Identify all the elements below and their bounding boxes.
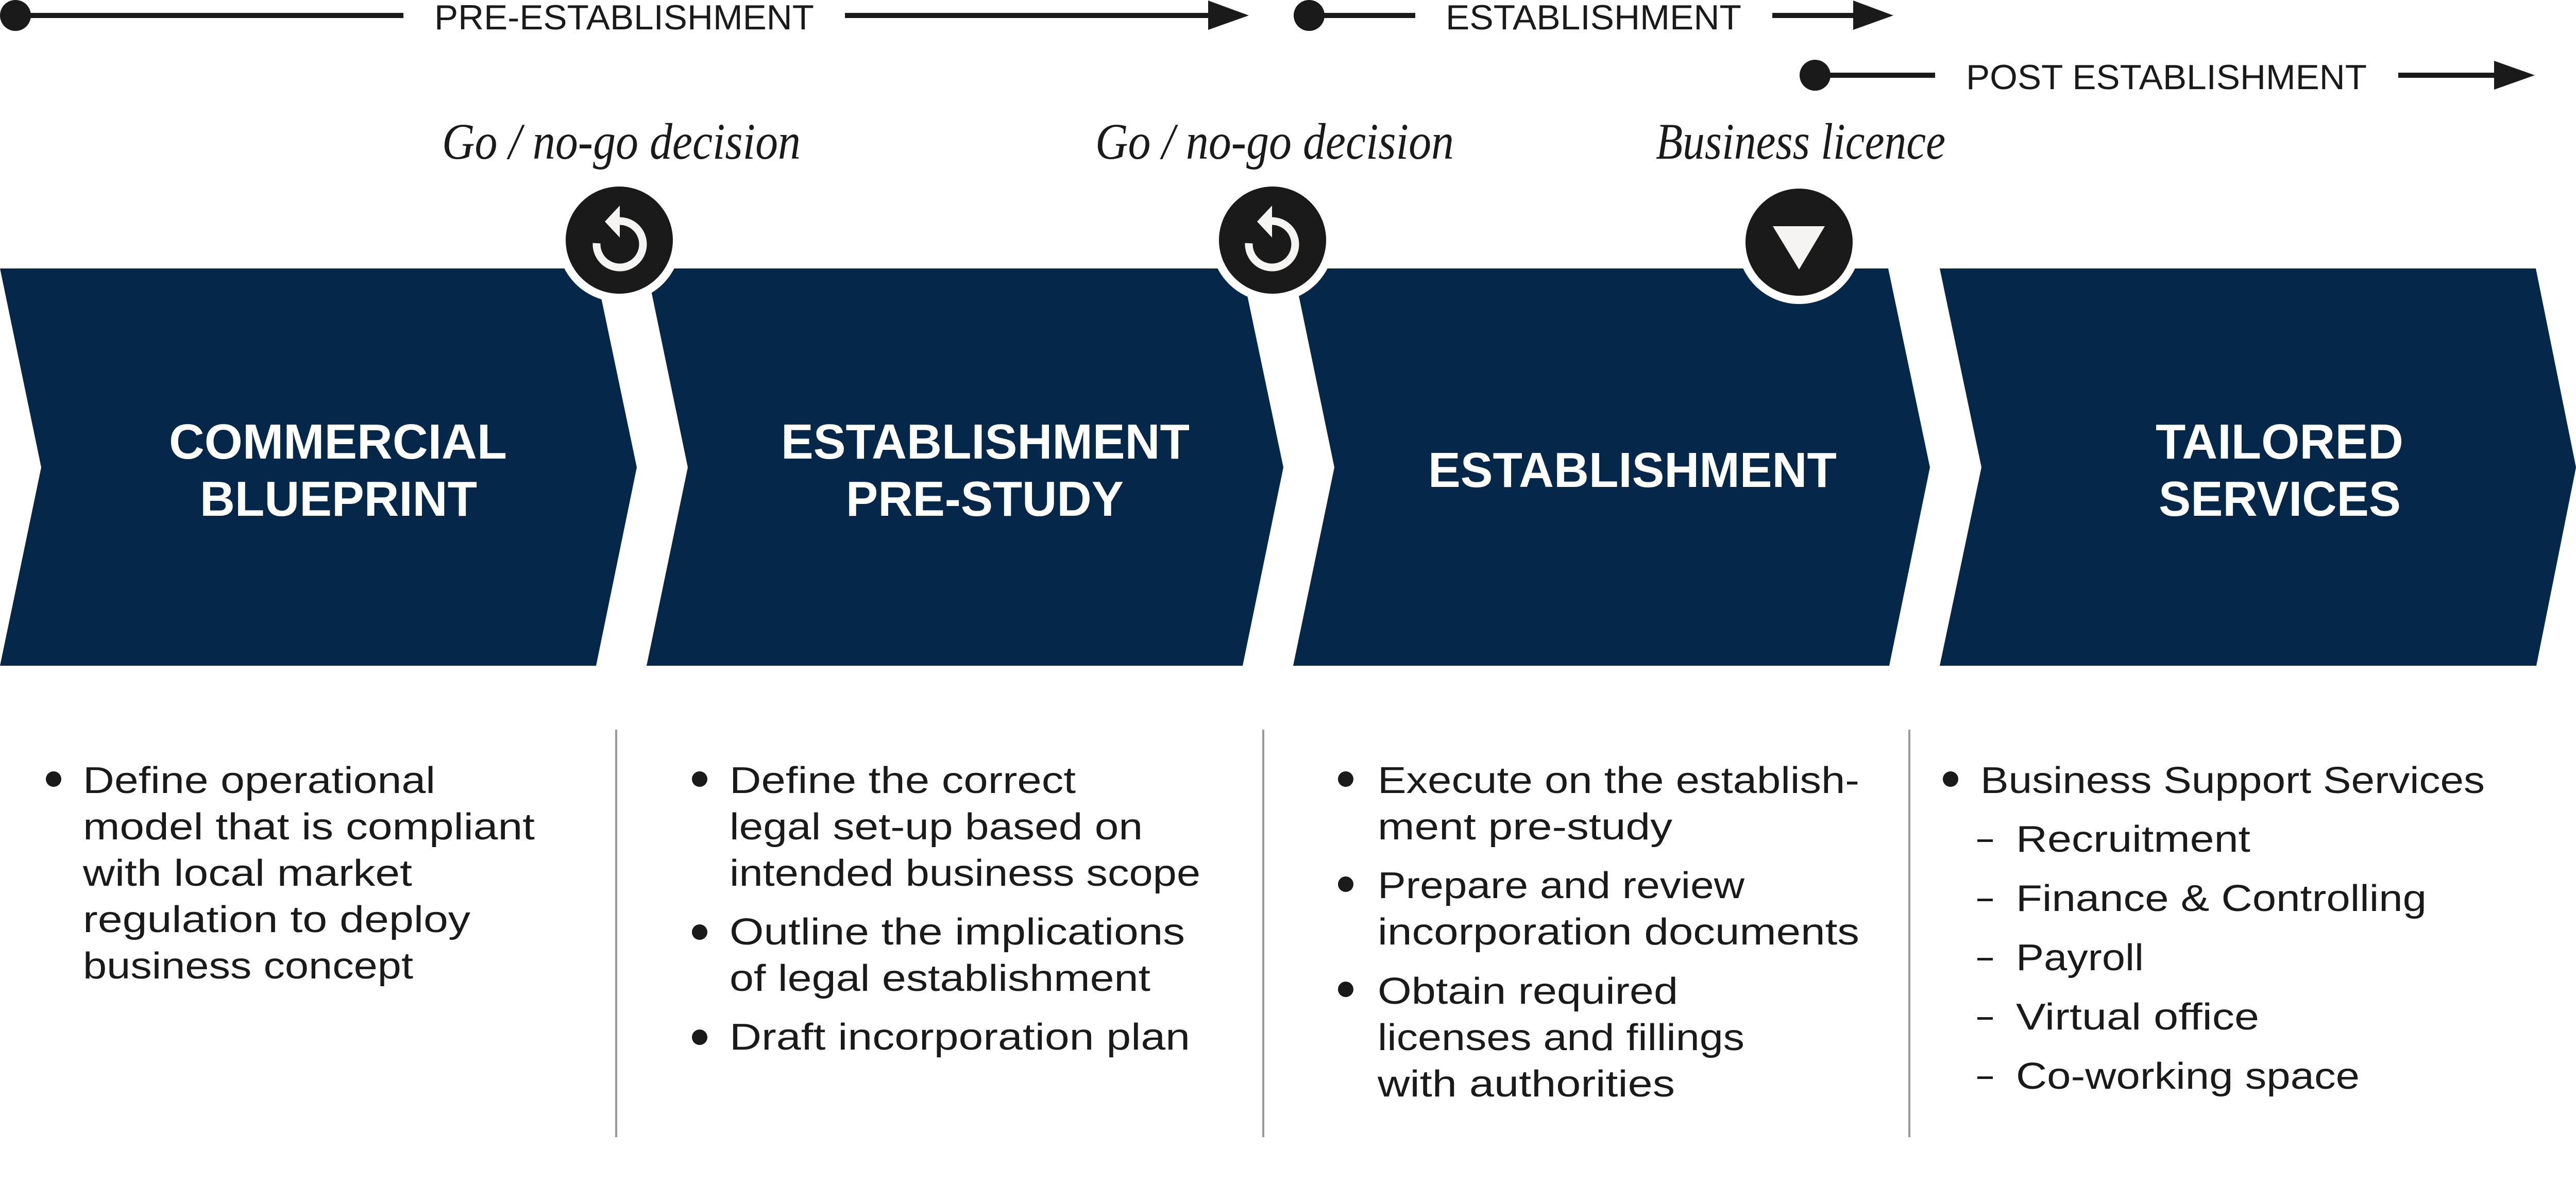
chevron: establishment pre-study: ESTABLISHMENT: [781, 414, 1190, 469]
text block: tailored services details: Virtual office: [2016, 997, 2259, 1038]
text block: establishment details: [1338, 760, 1859, 1105]
timeline arrow: establishment: [1294, 0, 1893, 37]
text block: pre-study details: intended business scope: [730, 853, 1200, 894]
chevron: commercial blueprint: COMMERCIAL: [169, 414, 507, 469]
text block: establishment details: ment pre-study: [1378, 806, 1672, 848]
text block: pre-study details: legal set-up based on: [730, 806, 1143, 848]
chevron: establishment pre-study: PRE-STUDY: [846, 471, 1124, 527]
milestone label: go / no-go decision 1: Go / no-go decision: [442, 113, 801, 170]
timeline arrow: post establishment: POST ESTABLISHMENT: [1966, 58, 2367, 97]
text block: commercial blueprint details: Define operational: [83, 760, 435, 801]
text block: establishment details: incorporation documents: [1378, 912, 1859, 953]
chevron: commercial blueprint: [0, 268, 637, 666]
milestone label: business licence: Business licence: [1656, 113, 1945, 170]
text block: pre-study details: Outline the implications: [730, 912, 1185, 953]
text block: tailored services details: Business Support Services: [1980, 760, 2485, 801]
text block: tailored services details: Recruitment: [2016, 819, 2250, 860]
chevron: tailored services: TAILORED: [2156, 414, 2403, 469]
icon: repeat decision 2: [1211, 178, 1334, 302]
text block: commercial blueprint details: with local market: [82, 853, 412, 894]
text block: tailored services details: Finance & Controlling: [2016, 878, 2427, 919]
icon: business licence milestone: [1737, 180, 1861, 304]
chevron: commercial blueprint: BLUEPRINT: [200, 471, 477, 527]
text block: pre-study details: Draft incorporation plan: [730, 1017, 1190, 1058]
timeline arrow: pre-establishment: [0, 0, 1249, 37]
text block: commercial blueprint details: [46, 760, 535, 987]
chevron: establishment pre-study: [647, 268, 1283, 666]
text block: tailored services details: Co-working space: [2016, 1056, 2360, 1097]
text block: tailored services details: Payroll: [2016, 937, 2144, 978]
text block: establishment details: with authorities: [1377, 1064, 1675, 1105]
text block: establishment details: Obtain required: [1378, 971, 1678, 1012]
chevron: establishment: ESTABLISHMENT: [1428, 443, 1837, 498]
text block: establishment details: licenses and fillings: [1378, 1017, 1744, 1058]
text block: establishment details: Prepare and review: [1378, 865, 1745, 906]
text block: establishment details: Execute on the establish-: [1378, 760, 1859, 801]
chevron: tailored services: SERVICES: [2159, 471, 2401, 527]
text block: commercial blueprint details: model that is compliant: [83, 806, 535, 848]
text block: pre-study details: of legal establishment: [730, 958, 1150, 999]
text block: pre-study details: [692, 760, 1200, 1058]
icon: repeat decision 1: [557, 178, 681, 302]
timeline arrow: post establishment: [1800, 58, 2535, 97]
text block: commercial blueprint details: business concept: [83, 946, 413, 987]
chevron: establishment: [1293, 268, 1930, 666]
milestone label: go / no-go decision 2: Go / no-go decision: [1095, 113, 1454, 170]
text block: pre-study details: Define the correct: [730, 760, 1076, 801]
text block: commercial blueprint details: regulation to deploy: [83, 899, 470, 940]
text block: tailored services details: [1943, 760, 2485, 1097]
chevron: tailored services: [1940, 268, 2576, 666]
